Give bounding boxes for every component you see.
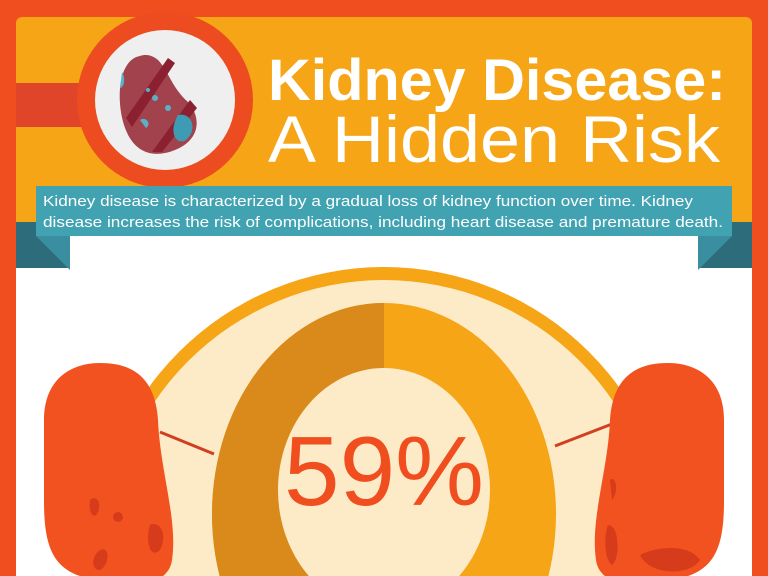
- banner: description: [36, 186, 732, 236]
- icon: magnifier with kidney: [77, 12, 253, 188]
- title: Kidney Disease:: [268, 48, 726, 113]
- chart: arc gauge: [149, 267, 619, 576]
- icon: right kidney: [595, 363, 724, 576]
- title: A Hidden Risk: [268, 102, 721, 176]
- banner: description: Kidney disease is characterized by a gradual loss of kidney function over time. Kidney: [43, 193, 694, 210]
- red bar behind magnifier: [16, 83, 86, 127]
- title: [268, 48, 726, 176]
- icon: left kidney: [44, 363, 173, 576]
- stat: 59%: 59%: [284, 416, 484, 526]
- banner: description: disease increases the risk of complications, including heart disease and premature death.: [43, 214, 723, 231]
- ribbon tails: [16, 222, 752, 276]
- connector lines: [160, 424, 612, 454]
